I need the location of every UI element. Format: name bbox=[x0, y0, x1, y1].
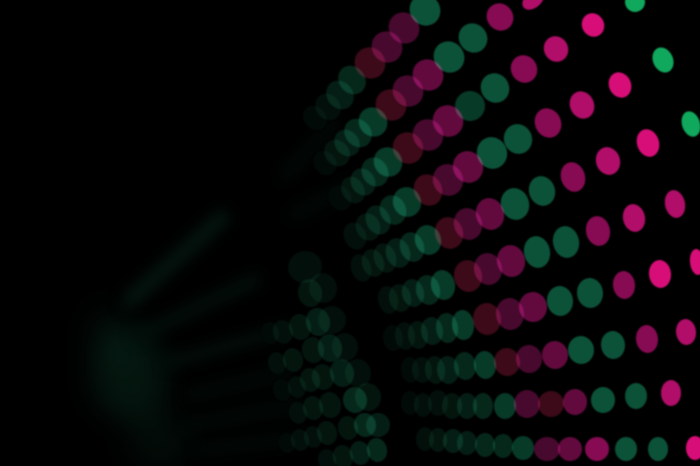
dot row 1 bbox=[298, 0, 447, 135]
dot row 10 bbox=[416, 427, 700, 461]
faint streaks bbox=[130, 125, 350, 450]
faint green haze lower left bbox=[88, 307, 192, 466]
dot row 3 bbox=[324, 0, 649, 215]
dot row 2 bbox=[308, 0, 547, 180]
dot row 6 bbox=[375, 188, 688, 316]
dot row 9 bbox=[401, 380, 681, 419]
dot row 8 bbox=[400, 318, 697, 385]
dot row 7 bbox=[382, 248, 700, 352]
dim green cluster bbox=[259, 248, 392, 466]
dot row 4 bbox=[339, 44, 677, 253]
dot row 5 bbox=[347, 109, 700, 284]
